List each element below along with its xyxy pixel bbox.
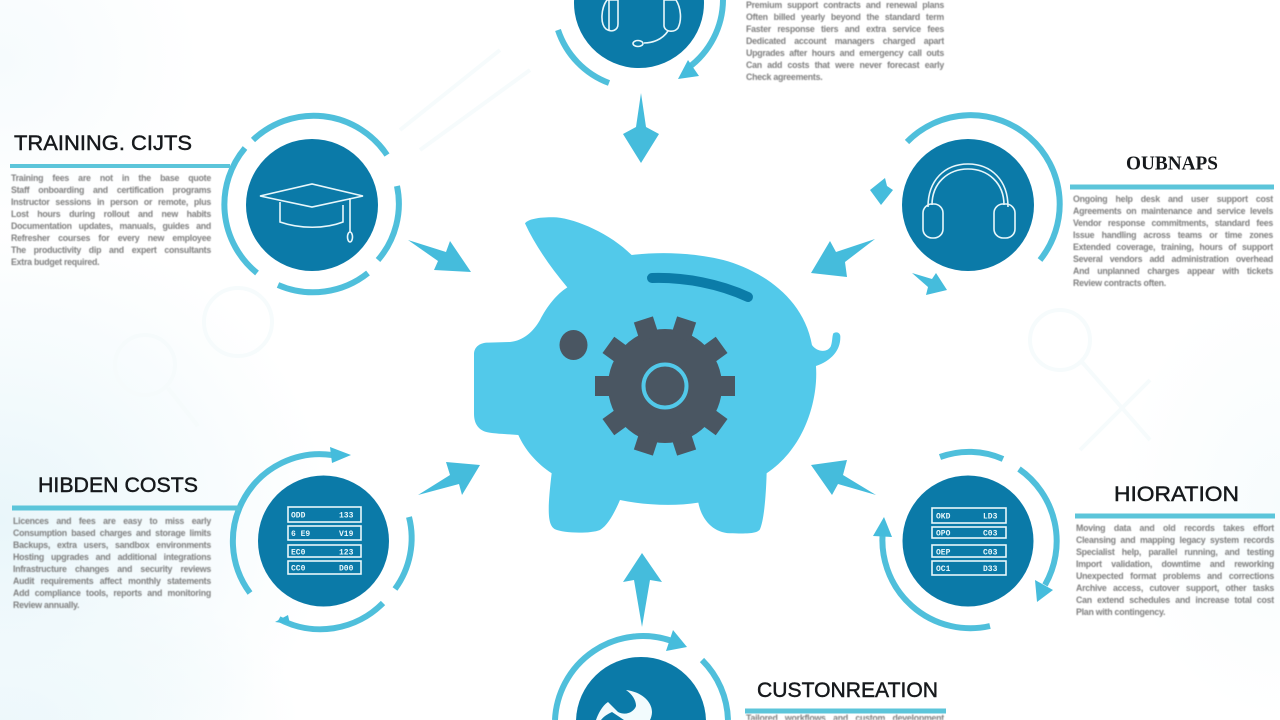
icon: headset: [602, 0, 680, 46]
text block: training costs: The productivity dip and expert consultants: [11, 245, 211, 255]
text block: headphones: Ongoing help desk and user support cost: [1073, 194, 1273, 204]
text block: headphones: [1072, 194, 1274, 288]
text block: migration: Plan with contingency.: [1076, 607, 1165, 617]
text block: headphones: Extended coverage, training, hours of support: [1073, 242, 1273, 252]
icon: server rack: LD3: [983, 512, 998, 522]
text block: hidden costs: Licences and fees are easy to miss early: [13, 516, 211, 526]
text block: hidden costs: Backups, extra users, sandbox environments: [13, 540, 211, 550]
text block: hidden costs: [12, 516, 212, 611]
migration arrowheads: [873, 517, 1053, 602]
training ring: [224, 116, 399, 292]
text block: training costs: [10, 173, 212, 268]
icon: wrench: [596, 690, 652, 720]
headphones rule: [1070, 184, 1274, 190]
icon: server rack: [288, 507, 361, 574]
training circle: [246, 139, 378, 271]
coin slot: [652, 278, 748, 297]
icon: server rack: OPO: [936, 530, 951, 538]
text block: training costs: Documentation updates, manuals, guides and: [11, 221, 211, 231]
text block: support: Upgrades after hours and emergency call outs: [746, 48, 944, 58]
text block: headphones: Issue handling across teams or time zones: [1073, 230, 1273, 240]
icon: server rack: C03: [983, 548, 998, 558]
icon: graduation cap: [260, 184, 363, 242]
text block: hidden costs: Consumption based charges and storage limits: [13, 528, 211, 538]
icon: server rack: OC1: [936, 565, 951, 574]
node: training costs: [10, 116, 399, 292]
customization arrowhead: [666, 630, 687, 651]
node: hidden costs: [12, 447, 412, 629]
icon: headphones: [923, 164, 1015, 238]
customization ring: [555, 636, 728, 720]
hidden costs ring: [233, 454, 412, 629]
text block: migration: Can extend schedules and increase total cost: [1076, 595, 1274, 605]
headphones ring: [907, 115, 1060, 260]
training rule: [10, 164, 230, 168]
text block: migration: Import validation, downtime and reworking: [1076, 559, 1274, 569]
text block: hidden costs: Add compliance tools, reports and monitoring: [13, 588, 211, 598]
text block: hidden costs: Infrastructure changes and security reviews: [13, 564, 211, 574]
text block: migration: Cleansing and mapping legacy system records: [1076, 535, 1274, 545]
node: headphones: [902, 115, 1274, 271]
text block: support: Check agreements.: [746, 72, 822, 82]
pig body: [474, 217, 840, 534]
text block: support: [746, 0, 944, 83]
migration circle: [902, 476, 1034, 606]
icon: server rack: OKD: [936, 512, 951, 522]
text block: migration: Specialist help, parallel running, and testing: [1076, 547, 1274, 557]
icon: server rack: EC0: [291, 548, 306, 558]
text block: hidden costs: Review annually.: [13, 600, 79, 610]
piggy bank with gear: [474, 217, 840, 534]
icon: server rack: V19: [339, 530, 354, 539]
text block: support: Faster response tiers and extra service fees: [746, 24, 944, 34]
node: support headset: [558, 0, 723, 83]
training heading: TRAINING. CIJTS: [14, 132, 192, 155]
customization heading: CUSTONREATION: [757, 679, 938, 702]
icon: server rack: [932, 508, 1006, 575]
arrows pointing to pig: [408, 93, 947, 627]
pig eye: [560, 330, 588, 360]
icon: server rack: 6 E9: [291, 530, 310, 539]
text block: training costs: Training fees are not in the base quote: [11, 173, 211, 183]
text block: migration: Unexpected format problems and corrections: [1076, 571, 1274, 581]
icon: server rack: D33: [983, 565, 998, 574]
text block: migration: Moving data and old records takes effort: [1076, 523, 1274, 533]
gear: [595, 316, 735, 456]
text block: training costs: Refresher courses for every new employee: [11, 233, 211, 243]
icon: server rack: CC0: [291, 564, 306, 574]
text block: headphones: Agreements on maintenance and service levels: [1073, 206, 1273, 216]
icon: server rack: 133: [339, 512, 354, 520]
text block: training costs: Instructor sessions in person or remote, plus: [11, 197, 211, 207]
text block: headphones: And unplanned charges appear with tickets: [1073, 266, 1273, 276]
text block: headphones: Several vendors add administration overhead: [1073, 254, 1273, 264]
icon: server rack: D00: [339, 564, 354, 574]
migration rule: [1075, 514, 1275, 518]
customization circle: [576, 657, 706, 720]
icon: server rack: C03: [983, 530, 998, 538]
node: migration: [873, 452, 1275, 628]
headphones circle: [902, 139, 1034, 271]
icon: server rack: OEP: [936, 548, 951, 558]
icon: server rack: ODD: [291, 512, 306, 520]
hidden costs circle: [258, 476, 389, 606]
text block: headphones: Vendor response commitments, standard fees: [1073, 218, 1273, 228]
text block: training costs: Lost hours during rollout and new habits: [11, 209, 211, 219]
text block: support: Often billed yearly beyond the standard term: [746, 12, 944, 22]
hidden costs arrowheads: [275, 447, 351, 624]
text block: support: Dedicated account managers charged apart: [746, 36, 944, 46]
headset ring: [558, 0, 723, 83]
headset arrowhead: [678, 60, 699, 79]
hidden costs rule: [12, 506, 240, 510]
text block: training costs: Staff onboarding and certification programs: [11, 185, 211, 195]
icon: server rack: 123: [339, 548, 354, 558]
text block: hidden costs: Audit requirements affect monthly statements: [13, 576, 211, 586]
text block: migration: [1076, 523, 1274, 618]
text block: headphones: Review contracts often.: [1073, 278, 1166, 288]
migration ring: [882, 452, 1057, 628]
text block: support: Can add costs that were never forecast early: [746, 60, 944, 70]
headphones heading: OUBNAPS: [1126, 152, 1218, 174]
migration heading: HIORATION: [1114, 483, 1239, 506]
text block: hidden costs: Hosting upgrades and additional integrations: [13, 552, 211, 562]
headset circle: [574, 0, 704, 68]
text block: migration: Archive access, cutover support, other tasks: [1076, 583, 1274, 593]
text block: training costs: Extra budget required.: [11, 257, 99, 267]
text block: support: Premium support contracts and renewal plans: [746, 0, 944, 10]
customization rule: [745, 708, 946, 714]
hidden costs heading: HIBDEN COSTS: [38, 474, 198, 497]
node: customization: [555, 630, 946, 720]
